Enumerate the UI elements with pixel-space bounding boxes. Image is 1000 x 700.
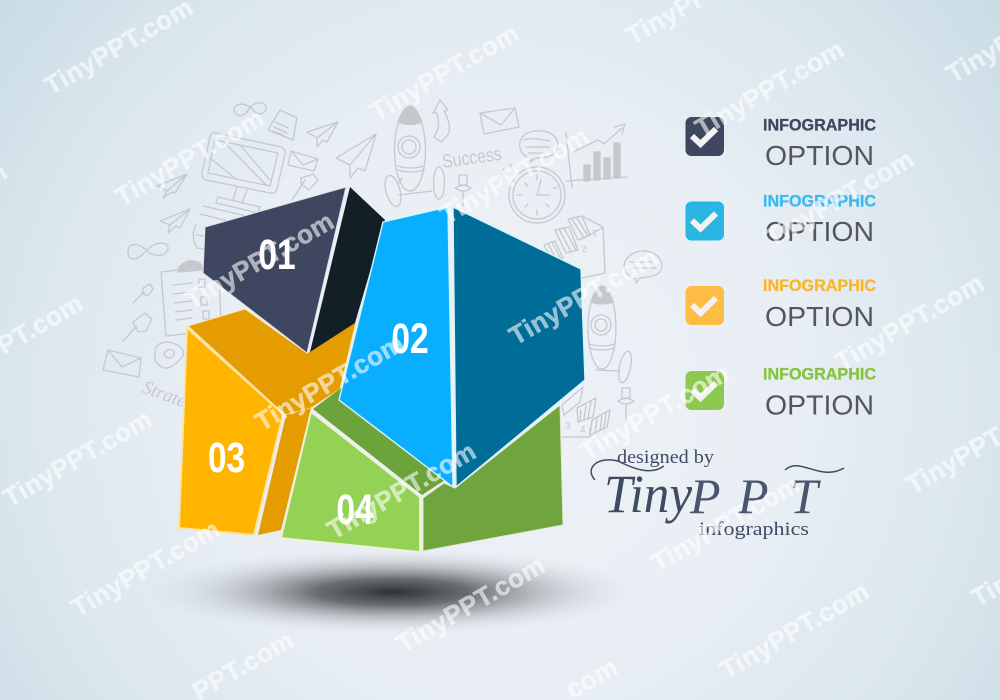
icon: amber check [686, 286, 724, 325]
doodle: note [268, 110, 297, 140]
block 04 green [281, 388, 563, 552]
legend item 2 [686, 192, 876, 247]
icon: blue check [686, 202, 724, 240]
watermarks: TinyPPT.com [250, 328, 409, 437]
watermarks: TinyPPT.com [180, 206, 339, 315]
watermarks: TinyPPT.com [646, 469, 805, 578]
icon: navy check [686, 117, 724, 156]
watermarks: TinyPPT.com [66, 514, 225, 623]
doodle: stairs one: 2 [582, 244, 587, 254]
doodle: stairs two: 4 [580, 425, 586, 436]
logo: Tiny script: Tiny [604, 464, 692, 524]
04 front face [281, 412, 420, 552]
03 number: 03 [208, 434, 245, 482]
block 02 blue [339, 207, 585, 487]
02 side face [453, 207, 585, 487]
doodle: up arrow [433, 100, 449, 142]
watermarks: TinyPPT.com [391, 550, 550, 659]
doodle: clock [498, 164, 565, 223]
doodle: rocket one [382, 106, 444, 208]
01 front face [203, 187, 346, 353]
01 side face [310, 187, 385, 352]
label: infographic navy: INFOGRAPHIC [763, 116, 876, 134]
label: infographic amber: INFOGRAPHIC [763, 276, 876, 295]
label: option: OPTION [765, 216, 874, 247]
doodle: stairs one: 1 [592, 228, 597, 238]
03 front face [179, 328, 283, 535]
watermarks: TinyPPT.com [830, 268, 989, 377]
04 side face [423, 405, 563, 551]
logo: designed by: designed by [617, 447, 715, 468]
doodle: success word: Success [441, 144, 503, 173]
watermarks: TinyPPT.com [435, 121, 594, 230]
doodle: envelopes [103, 108, 519, 377]
doodle: clipboard [161, 261, 221, 336]
doodle: rocket two [588, 286, 634, 384]
label: infographic blue: INFOGRAPHIC [763, 192, 876, 210]
watermarks: TinyPPT.com [715, 576, 874, 685]
doodle: monitor [193, 133, 285, 250]
doodle: stairs one [544, 216, 605, 278]
legend item 1 [686, 116, 876, 171]
03 side face [258, 408, 311, 535]
icon: green check [686, 371, 724, 410]
watermarks: TinyPPT.com [760, 144, 919, 253]
label: option: OPTION [765, 301, 874, 332]
watermarks: TinyPPT.com [0, 404, 157, 513]
03 top face [188, 309, 356, 415]
watermarks: TinyPPT.com [575, 358, 734, 467]
02 front face [339, 207, 453, 487]
logo: infographics: infographics [699, 519, 809, 540]
watermarks: TinyPPT.com [504, 242, 663, 351]
block 01 navy [203, 187, 385, 353]
doodle: strategy word: Strategy [139, 377, 207, 419]
watermarks: TinyPPT.com [365, 18, 524, 127]
label: infographic green: INFOGRAPHIC [763, 364, 876, 384]
watermarks: TinyPPT.com [690, 34, 849, 143]
label: option: OPTION [765, 390, 874, 420]
logo: PPT script: PPT [689, 468, 821, 524]
legend item 3 [686, 276, 876, 332]
block 03 orange [179, 309, 356, 535]
watermarks: TinyPPT.com [322, 436, 481, 545]
legend item 4 [686, 364, 876, 420]
doodle: stairs two [562, 387, 610, 437]
doodle: speech bubbles [520, 131, 662, 283]
04 number: 04 [336, 486, 374, 534]
02 number: 02 [391, 315, 429, 363]
doodle: push pins [123, 174, 634, 419]
doodle: paper planes [157, 122, 376, 233]
doodle: stairs two: 3 [565, 421, 571, 432]
01 number: 01 [258, 231, 296, 279]
ground shadow [141, 548, 645, 636]
doodle: infinity signs [128, 103, 266, 368]
doodle: bar chart [566, 124, 627, 188]
04 top face [313, 388, 445, 495]
designed by logo [591, 447, 844, 540]
doodle icons [103, 100, 662, 437]
label: option: OPTION [765, 140, 874, 171]
watermarks: TinyPPT.com [110, 103, 269, 212]
